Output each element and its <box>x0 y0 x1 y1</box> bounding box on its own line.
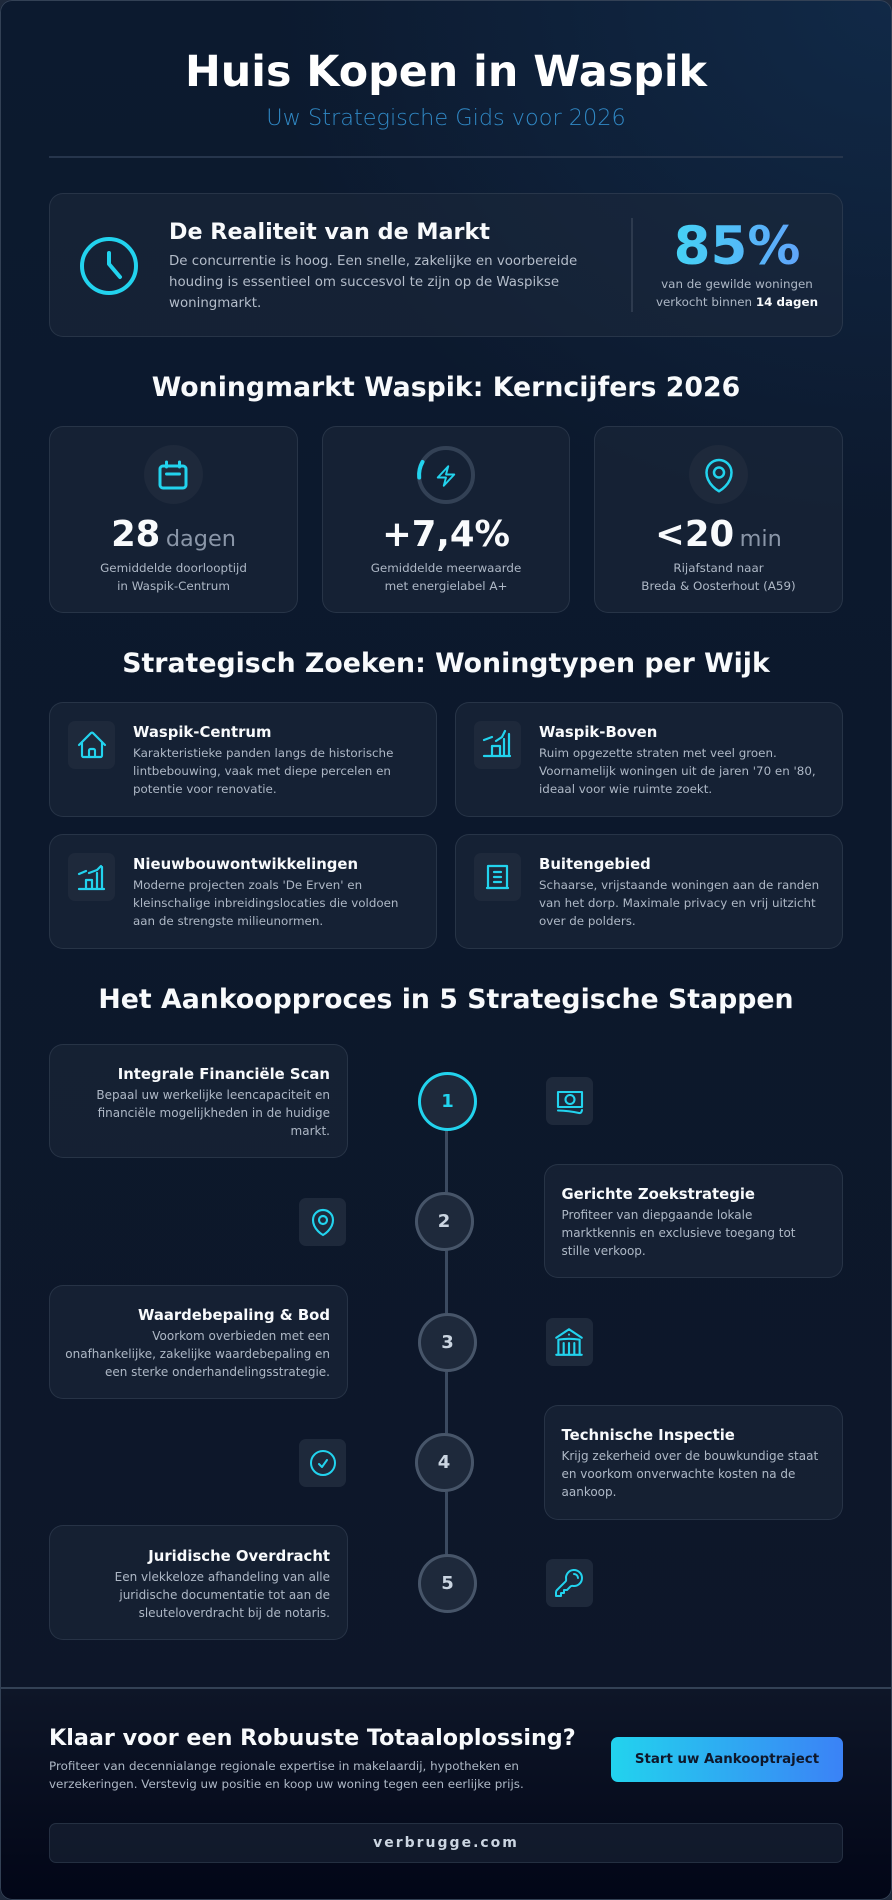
step text: financiële mogelijkheden in de huidige <box>98 1106 330 1120</box>
market text: De concurrentie is hoog. Een snelle, zakelijke en voorbereide <box>169 254 577 269</box>
card text: Voornamelijk woningen uit de jaren '70 en '80, <box>539 764 816 778</box>
website: verbrugge.com <box>373 1835 519 1851</box>
card title: Waspik-Boven <box>539 723 657 741</box>
step number <box>418 1313 477 1372</box>
step text: Voorkom overbieden met een <box>152 1329 330 1343</box>
icon: neighbourhood buildings <box>474 721 521 769</box>
market text: woningmarkt. <box>169 296 261 311</box>
card title: Nieuwbouwontwikkelingen <box>133 855 358 873</box>
title: Huis Kopen in Waspik <box>185 47 707 97</box>
panel: stat meerwaarde <box>322 426 570 613</box>
card text: over de polders. <box>539 914 636 928</box>
step text <box>562 1208 796 1258</box>
stat label: Gemiddelde doorlooptijd <box>100 560 247 574</box>
step text: Bepaal uw werkelijke leencapaciteit en <box>96 1088 330 1102</box>
icon: map pin <box>299 1198 346 1246</box>
step 3 <box>49 1285 593 1399</box>
panel: market reality <box>49 193 843 337</box>
step number <box>418 1072 477 1131</box>
card text: potentie voor renovatie. <box>133 782 277 796</box>
heading: woningtypen: Strategisch Zoeken: Woningtypen per Wijk <box>122 648 770 679</box>
icon: map pin <box>689 445 748 504</box>
step text: Profiteer van diepgaande lokale <box>562 1208 752 1222</box>
heading: stappen: Het Aankoopproces in 5 Strategische Stappen <box>98 984 794 1015</box>
heading: kerncijfers: Woningmarkt Waspik: Kerncijfers 2026 <box>152 372 740 403</box>
stat value: 28dagen <box>111 514 236 555</box>
step text: Een vlekkeloze afhandeling van alle <box>115 1570 330 1584</box>
card text: Schaarse, vrijstaande woningen aan de randen <box>539 878 819 892</box>
market text <box>169 254 577 311</box>
step text: aankoop. <box>562 1485 616 1499</box>
step card <box>49 1525 348 1640</box>
footer background band <box>0 1687 892 1900</box>
step text: marktkennis en exclusieve toegang tot <box>562 1226 796 1240</box>
icon: house <box>68 721 115 769</box>
card text: Moderne projecten zoals 'De Erven' en <box>133 878 362 892</box>
statistic caption: van de gewilde woningen <box>661 277 813 291</box>
step 5 <box>49 1525 593 1640</box>
step text: stille verkoop. <box>562 1244 646 1258</box>
card text <box>539 746 816 796</box>
card text: ideaal voor wie ruimte zoekt. <box>539 782 712 796</box>
stat value: <20min <box>655 514 782 555</box>
step number: 5 <box>441 1573 454 1594</box>
step number <box>414 1192 474 1251</box>
card text: van het dorp. Maximale privacy en vrij uitzicht <box>539 896 816 910</box>
icon: key <box>546 1559 592 1607</box>
step number: 3 <box>441 1332 454 1353</box>
card text: lintbebouwing, vaak met diepe percelen en <box>133 764 391 778</box>
card text <box>133 878 398 928</box>
step text: een sterke onderhandelingsstrategie. <box>105 1365 330 1379</box>
step text: Krijg zekerheid over de bouwkundige staat <box>562 1449 818 1463</box>
call to action text: verzekeringen. Verstevig uw positie en koop uw woning tegen een eerlijke prijs. <box>49 1777 524 1791</box>
step text: markt. <box>291 1124 330 1138</box>
step title: Technische Inspectie <box>562 1426 735 1444</box>
button: Start uw Aankooptraject <box>635 1752 819 1766</box>
step number <box>414 1433 474 1492</box>
call to action text: Profiteer van decennialange regionale expertise in makelaardij, hypotheken en <box>49 1759 519 1773</box>
stat label: Rijafstand naar <box>673 560 764 574</box>
card title: Waspik-Centrum <box>133 723 271 741</box>
card text: Ruim opgezette straten met veel groen. <box>539 746 777 760</box>
statistic caption: verkocht binnen 14 dagen <box>656 295 818 309</box>
step number <box>418 1554 477 1613</box>
panel: stat rijafstand <box>594 426 843 613</box>
step text: en voorkom onverwachte kosten na de <box>562 1467 795 1481</box>
step 2 <box>299 1164 843 1278</box>
step text <box>562 1449 818 1499</box>
card text: kleinschalige inbreidingslocaties die voldoen <box>133 896 398 910</box>
button <box>611 1736 843 1782</box>
icon: clock <box>80 237 138 295</box>
card title: Buitengebied <box>539 855 651 873</box>
icon: building <box>474 853 521 901</box>
step title: Gerichte Zoekstrategie <box>562 1185 755 1203</box>
card text: Karakteristieke panden langs de historische <box>133 746 393 760</box>
step number: 1 <box>441 1091 454 1112</box>
panel: Waspik-Centrum <box>49 702 437 817</box>
icon: calendar <box>144 445 203 504</box>
step number: 4 <box>438 1452 450 1473</box>
step text: sleuteloverdracht bij de notaris. <box>139 1606 330 1620</box>
step text <box>96 1088 330 1138</box>
step card <box>49 1044 348 1158</box>
card text: aan de strengste milieunormen. <box>133 914 323 928</box>
icon: check circle <box>299 1439 346 1487</box>
market heading: De Realiteit van de Markt <box>169 219 490 245</box>
step title: Waardebepaling & Bod <box>138 1306 330 1324</box>
website <box>49 1823 843 1863</box>
step card <box>49 1285 348 1399</box>
market text: houding is essentieel om succesvol te zijn op de Waspikse <box>169 275 559 290</box>
call to action text <box>49 1759 524 1791</box>
subtitle: Uw Strategische Gids voor 2026 <box>266 105 626 131</box>
stat label: met energielabel A+ <box>385 578 507 592</box>
stat label <box>641 560 796 592</box>
step card <box>544 1405 843 1520</box>
stat label: Breda & Oosterhout (A59) <box>641 578 796 592</box>
step text <box>115 1570 330 1620</box>
stat label <box>100 560 247 592</box>
step card <box>544 1164 843 1278</box>
statistic caption <box>656 277 818 309</box>
icon: new buildings <box>68 853 115 901</box>
panel: Buitengebied <box>455 834 843 949</box>
stat value: +7,4% <box>382 514 510 555</box>
stat label <box>371 560 521 592</box>
step title: Juridische Overdracht <box>148 1547 330 1565</box>
card text <box>133 746 393 796</box>
step text <box>65 1329 330 1379</box>
step number: 2 <box>438 1211 450 1232</box>
statistic: 85 percent: 85% <box>674 216 800 277</box>
step text: onafhankelijke, zakelijke waardebepaling en <box>65 1347 330 1361</box>
icon: bank <box>546 1318 592 1366</box>
icon: banknotes <box>546 1077 592 1125</box>
card text <box>539 878 819 928</box>
panel: Waspik-Boven <box>455 702 843 817</box>
step title: Integrale Financiële Scan <box>118 1065 330 1083</box>
stat label: in Waspik-Centrum <box>117 578 230 592</box>
panel: stat doorlooptijd <box>49 426 298 613</box>
step 4 <box>299 1405 843 1520</box>
stat label: Gemiddelde meerwaarde <box>371 560 521 574</box>
panel: Nieuwbouwontwikkelingen <box>49 834 437 949</box>
step 1 <box>49 1044 593 1158</box>
icon: energy ring with bolt <box>417 446 475 504</box>
timeline line <box>444 1130 448 1560</box>
step text: juridische documentatie tot aan de <box>119 1588 330 1602</box>
call to action heading: Klaar voor een Robuuste Totaaloplossing? <box>49 1725 576 1751</box>
